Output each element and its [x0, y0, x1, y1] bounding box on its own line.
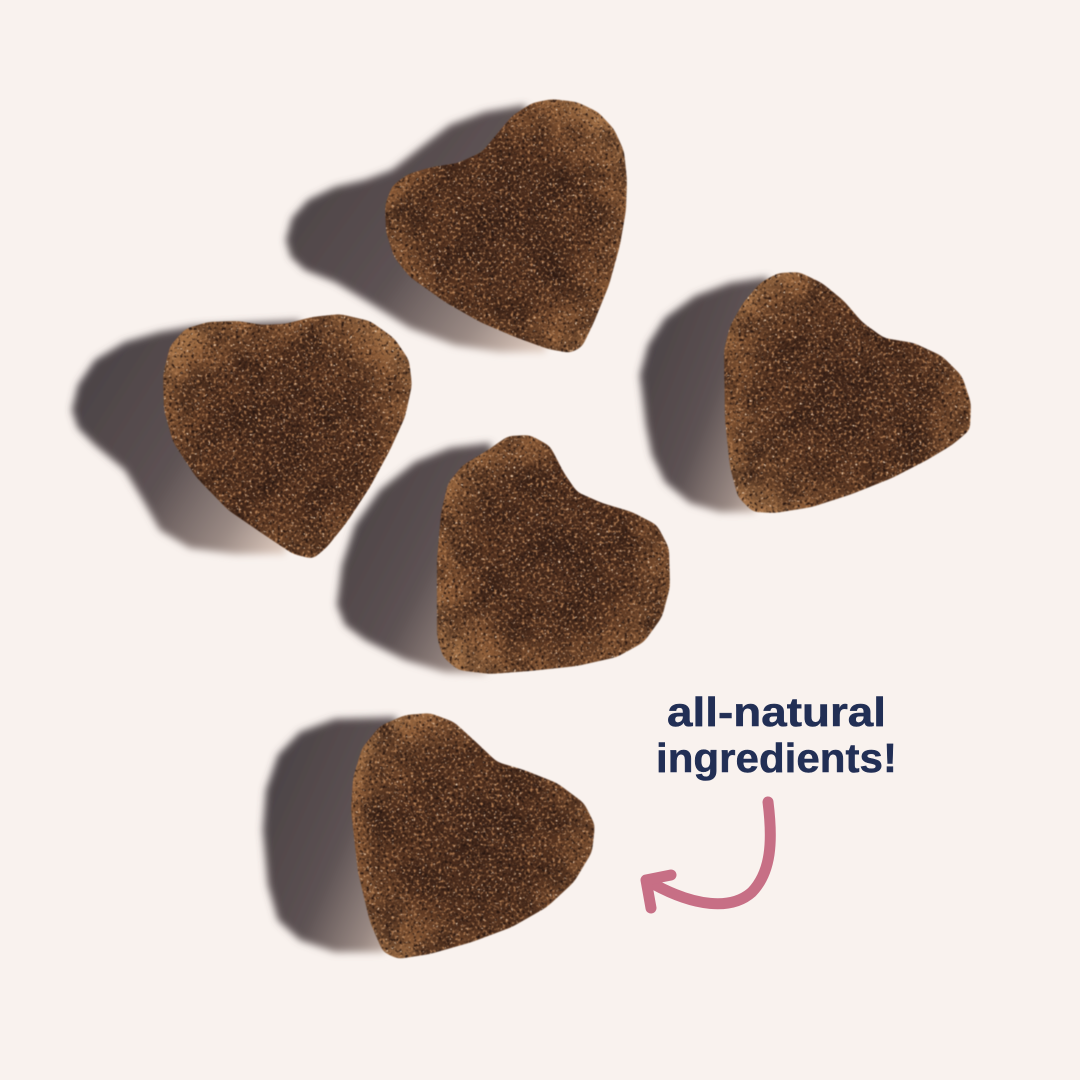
shadow: left heart: [72, 320, 300, 554]
heading: all-natural ingredients: [656, 689, 897, 781]
heart treat: left: [163, 314, 412, 559]
heart treat: bottom: [351, 713, 595, 959]
shadow: top heart: [286, 105, 560, 352]
heart treat: center: [437, 435, 670, 674]
heart treat: top: [385, 99, 627, 353]
heading: all-natural ingredients: ingredients!: [656, 735, 897, 781]
shadow: center heart: [337, 443, 520, 674]
shadow: bottom heart: [263, 717, 420, 952]
heart treat: right: [724, 272, 971, 513]
heading: all-natural ingredients: all-natural: [667, 689, 886, 735]
arrow: curved pink arrow pointing to treat: [646, 802, 770, 908]
shadow: right heart: [640, 277, 780, 512]
